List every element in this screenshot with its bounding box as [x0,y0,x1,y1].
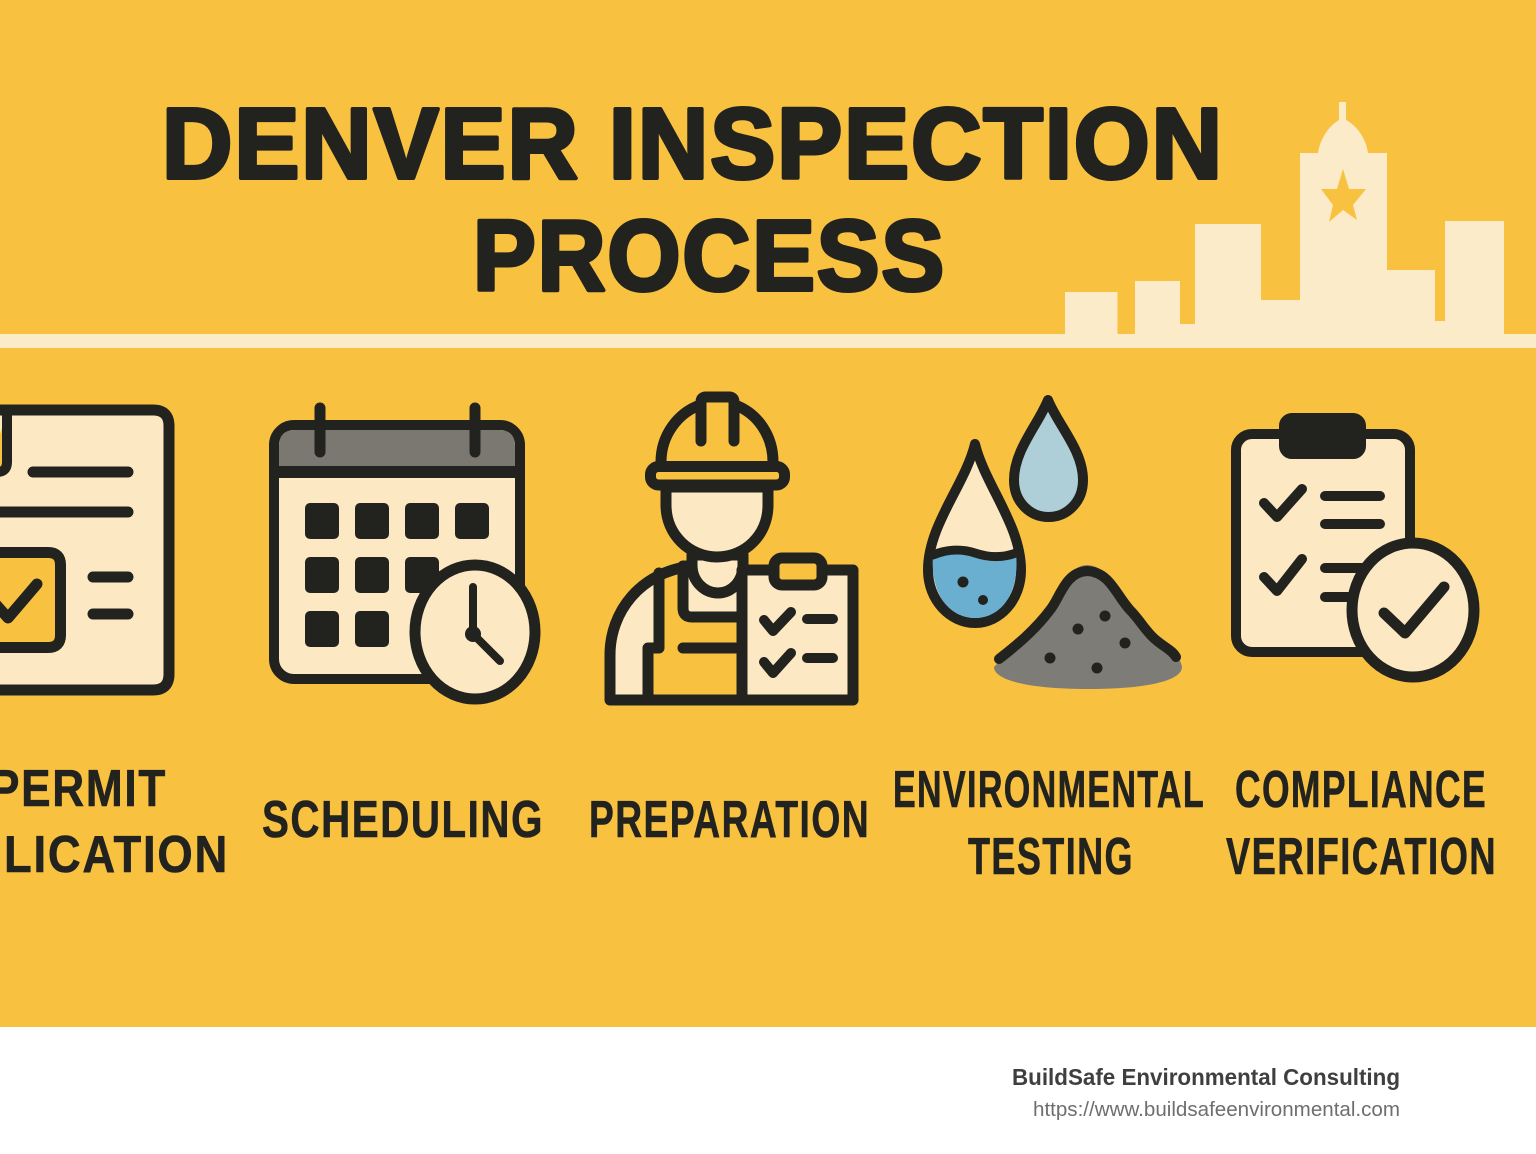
icon: star [1321,169,1366,222]
worker arm [610,577,659,700]
label: preparation: PREPARATION [589,791,870,849]
icon: calendar with clock [274,408,535,699]
title [162,88,1224,312]
label: permit application [0,760,229,884]
worker face [666,487,768,557]
skyline divider [0,102,1536,348]
title: PROCESS [473,200,946,312]
clipboard [742,570,853,700]
large drop [928,444,1021,623]
label: permit application: LICATION [4,826,229,884]
icon: inspector worker with clipboard [610,397,853,700]
label: compliance verification [1226,761,1497,886]
footer credit: https://www.buildsafeenvironmental.com [1033,1099,1400,1121]
footer credit: BuildSafe Environmental Consulting [1012,1064,1400,1090]
footer credit [1012,1064,1400,1121]
label: environmental testing: TESTING [968,828,1134,886]
label: environmental testing: ENVIRONMENTAL [893,761,1205,819]
hard hat [661,405,773,462]
worker neck [692,555,743,593]
worker bib [683,566,742,617]
icon: compliance clipboard [1236,418,1474,677]
soil pile [994,565,1182,689]
small drop [1014,400,1083,517]
title: DENVER INSPECTION [162,88,1224,200]
label: environmental testing [893,761,1205,886]
icon: permit document [0,410,169,690]
label: scheduling: SCHEDULING [262,791,544,849]
step labels [0,760,1497,886]
icon: water drops and soil [928,400,1182,689]
